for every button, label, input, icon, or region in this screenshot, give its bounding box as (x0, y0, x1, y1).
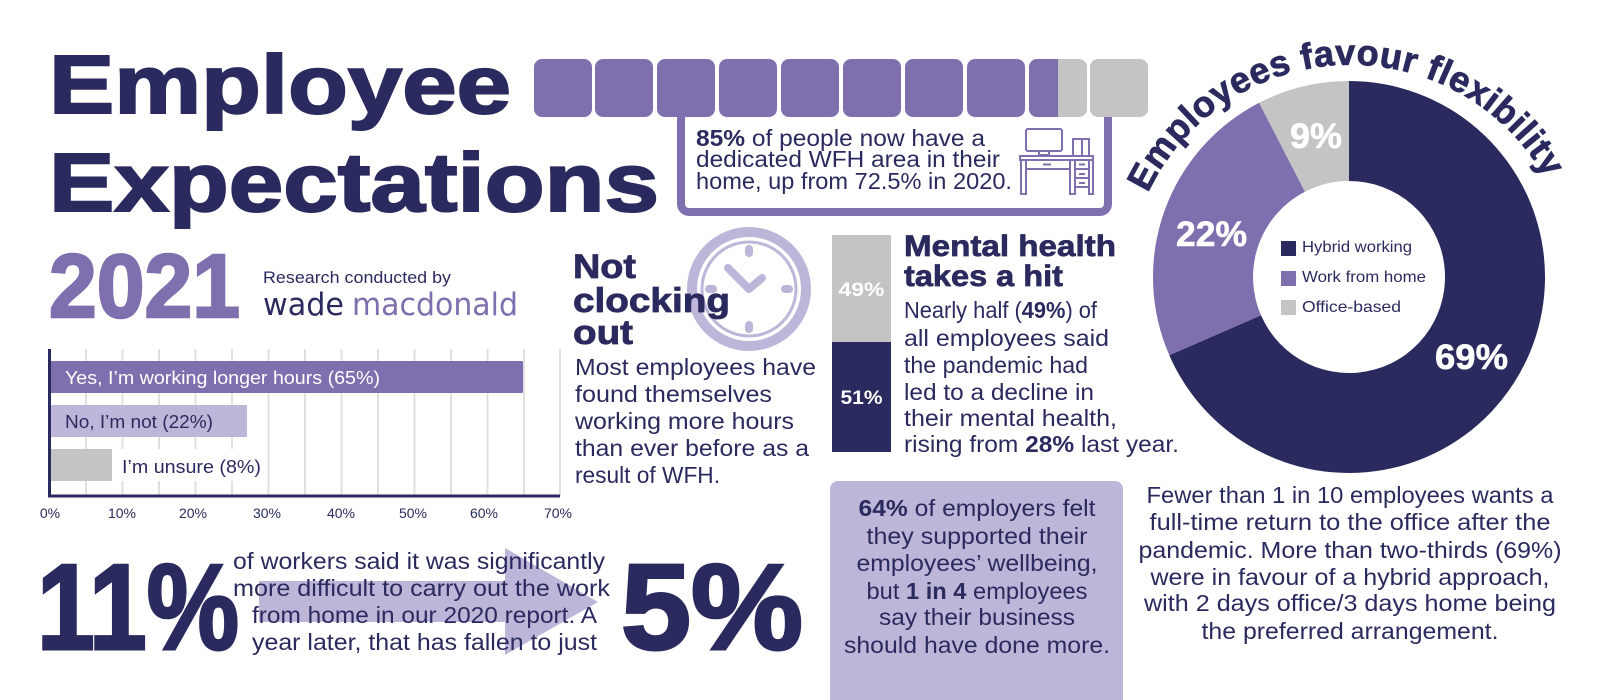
research credit: wade (263, 287, 344, 323)
icon: desk with computer (1020, 129, 1093, 194)
heading: mental health: takes a hit (904, 260, 1063, 293)
bar chart: working longer hours: 60% (470, 505, 498, 521)
callout: WFH area: 85% of people now have a (696, 125, 985, 151)
text: mental health: their mental health, (904, 405, 1117, 431)
donut legend: Hybrid working (1302, 239, 1412, 256)
text: working hours: result of WFH. (575, 462, 720, 488)
donut chart (1153, 81, 1545, 473)
bar chart: working longer hours: 40% (327, 505, 355, 521)
research credit: Research conducted by (263, 269, 452, 287)
text: mental health: rising from 28% last year. (904, 431, 1179, 457)
text: mental health: the pandemic had (904, 352, 1088, 378)
bar chart: working longer hours: Yes, I’m working longer hours (65%) (65, 368, 380, 388)
panel: employer wellbeing: should have done more. (844, 632, 1110, 658)
stacked bar: mental health (832, 235, 891, 452)
bar chart: working longer hours: No, I’m not (22%) (65, 412, 213, 432)
heading: mental health (904, 230, 1116, 293)
text: mental health (904, 297, 1179, 457)
heading: not clocking out (573, 248, 730, 352)
heading: not clocking out: out (573, 314, 633, 352)
panel: employer wellbeing: but 1 in 4 employees (866, 578, 1088, 604)
panel: employer wellbeing: they supported their (866, 523, 1088, 549)
text: working hours: Most employees have (575, 354, 816, 380)
heading: not clocking out: Not (573, 248, 636, 286)
text: return to office (1138, 482, 1562, 644)
text: mental health: all employees said (904, 325, 1109, 351)
research credit (263, 269, 518, 323)
panel: employer wellbeing: employees’ wellbeing, (856, 550, 1098, 576)
bar chart: working longer hours (40, 349, 572, 521)
title: Expectations (49, 136, 659, 229)
donut legend (1281, 239, 1426, 316)
text: mental health: led to a decline in (904, 379, 1094, 405)
text: difficulty of WFH (233, 548, 611, 655)
donut chart: 22% (1176, 215, 1247, 254)
bar chart: working longer hours: I’m unsure (8%) (122, 457, 261, 477)
callout: WFH area (681, 117, 1108, 212)
donut chart: 69% (1435, 338, 1508, 377)
bar chart: working longer hours: 70% (544, 505, 572, 521)
panel: employer wellbeing: say their business (879, 604, 1075, 630)
text: return to office: the preferred arrangement. (1202, 618, 1498, 644)
stat: 11 percent: 11% (37, 539, 239, 675)
donut legend: Office-based (1302, 299, 1401, 316)
bar chart: working longer hours: 10% (108, 505, 136, 521)
text: working hours (574, 354, 816, 488)
bar chart: working longer hours: 20% (179, 505, 207, 521)
stat: 5 percent: 5% (621, 539, 803, 675)
text: return to office: full-time return to the office after the (1150, 509, 1550, 535)
text: mental health: Nearly half (49%) of (904, 297, 1098, 323)
callout: WFH area: home, up from 72.5% in 2020. (696, 168, 1012, 194)
bar chart: working longer hours: 30% (253, 505, 281, 521)
text: difficulty of WFH: year later, that has fallen to just (252, 629, 598, 655)
year heading: 2021 (49, 237, 240, 337)
panel: employer wellbeing: 64% of employers felt (858, 495, 1096, 521)
text: working hours: found themselves (575, 381, 772, 407)
text: return to office: with 2 days office/3 days home being (1143, 590, 1556, 616)
heading: mental health: Mental health (904, 230, 1116, 263)
text: difficulty of WFH: of workers said it was significantly (233, 548, 606, 574)
stacked bar: mental health: 51% (840, 388, 883, 409)
donut chart: 9% (1290, 117, 1342, 156)
text: difficulty of WFH: more difficult to carry out the work (233, 575, 611, 601)
text: return to office: pandemic. More than two-thirds (69%) (1138, 537, 1562, 563)
research credit: macdonald (352, 287, 518, 323)
text: return to office: were in favour of a hybrid approach, (1149, 564, 1550, 590)
title: curved donut heading: Employees favour flexibility (1126, 42, 1562, 192)
text: working hours: working more hours (574, 408, 794, 434)
callout: WFH area: dedicated WFH area in their (696, 146, 1000, 172)
title: Employee (49, 38, 511, 131)
bar chart: working longer hours: 0% (40, 505, 60, 521)
heading: not clocking out: clocking (573, 282, 730, 320)
title (49, 38, 659, 229)
panel: employer wellbeing (830, 481, 1123, 700)
text: return to office: Fewer than 1 in 10 employees wants a (1146, 482, 1554, 508)
donut legend: Work from home (1302, 269, 1426, 286)
pictogram bar: 85 percent (534, 59, 1148, 117)
bar chart: working longer hours: 50% (399, 505, 427, 521)
text: working hours: than ever before as a (575, 435, 809, 461)
stacked bar: mental health: 49% (838, 280, 885, 301)
icon: clock (692, 232, 806, 346)
arrow (259, 548, 598, 655)
text: difficulty of WFH: from home in our 2020 report. A (252, 602, 598, 628)
